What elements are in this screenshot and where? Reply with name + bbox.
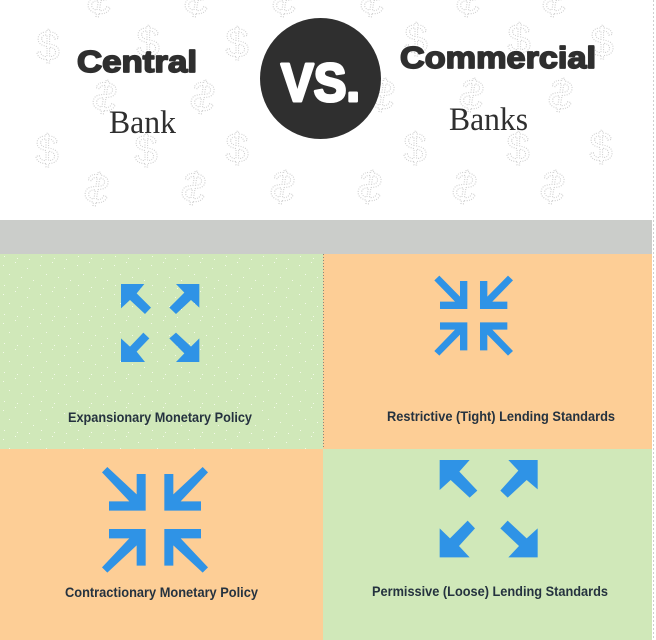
text: $ (179, 162, 209, 213)
heading: Central Bank: Central (77, 44, 197, 79)
icon: contracting arrows (434, 276, 513, 356)
text: $ (589, 123, 613, 170)
text: $ (403, 124, 427, 171)
heading: Commercial Banks (400, 40, 596, 138)
text: $ (506, 124, 530, 171)
text: $ (368, 69, 398, 120)
text: $ (590, 18, 614, 65)
heading: Central Bank (77, 44, 197, 141)
text: $ (188, 71, 218, 122)
text: $ (90, 71, 120, 122)
panel: expansionary monetary policy (0, 254, 323, 449)
badge: VS. circle (260, 18, 381, 139)
panel: permissive lending standards (323, 449, 652, 640)
text: $ (136, 18, 160, 65)
icon: expanding arrows (121, 284, 199, 362)
label: restrictive: Restrictive (Tight) Lending Standards (387, 408, 615, 424)
text: $ (36, 22, 60, 69)
divider band (0, 220, 652, 254)
text: $ (450, 161, 480, 212)
panel: contractionary monetary policy (0, 449, 323, 640)
label: contractionary: Contractionary Monetary Policy (65, 584, 258, 600)
badge: VS. circle: VS. (281, 53, 360, 113)
text: $ (404, 15, 428, 62)
heading: Central Bank: Bank (109, 105, 176, 141)
panel: restrictive lending standards (323, 254, 652, 449)
text: $ (507, 15, 531, 62)
text: $ (268, 161, 298, 212)
heading: Commercial Banks: Commercial (400, 40, 596, 75)
text: $ (457, 69, 487, 120)
text: $ (35, 126, 59, 173)
text: $ (355, 161, 385, 212)
text: $ (546, 69, 576, 120)
icon: contracting arrows large (102, 467, 208, 573)
label: permissive: Permissive (Loose) Lending Standards (372, 583, 608, 599)
heading: Commercial Banks: Banks (449, 102, 528, 138)
text: $ (225, 124, 249, 171)
text: $ (225, 19, 249, 66)
icon: expanding arrows large (440, 460, 538, 557)
text: $ (134, 126, 158, 173)
text: $ (538, 161, 568, 212)
text: $ (82, 163, 112, 214)
label: expansionary: Expansionary Monetary Policy (68, 409, 252, 425)
